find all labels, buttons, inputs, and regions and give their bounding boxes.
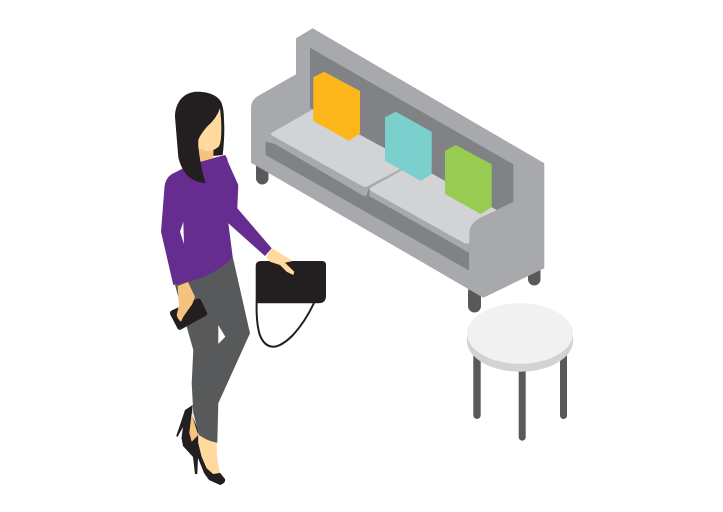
- pants: [175, 257, 250, 443]
- sweater arm gap: [180, 222, 184, 244]
- right hand: [266, 248, 294, 275]
- sofa back recess: [310, 48, 513, 210]
- bag strap: [257, 300, 314, 347]
- table: [467, 303, 573, 441]
- front foot: [198, 433, 220, 474]
- phone: [170, 299, 207, 330]
- green box: [445, 145, 492, 214]
- table top: [467, 303, 573, 364]
- table edge: [467, 335, 573, 372]
- handbag: [256, 261, 326, 347]
- back foot: [189, 413, 198, 442]
- table legs: [473, 350, 567, 441]
- teal box: [385, 112, 432, 181]
- hair: [175, 92, 224, 183]
- sofa legs: [256, 160, 540, 312]
- sofa body: [251, 28, 544, 298]
- sofa base shadow: [266, 142, 469, 270]
- bag body: [256, 261, 326, 303]
- face: [198, 108, 221, 151]
- orange box: [313, 72, 360, 141]
- woman: [161, 92, 326, 485]
- pants gap: [218, 325, 225, 344]
- left hand: [177, 282, 195, 322]
- sweater: [161, 155, 272, 285]
- sofa: [251, 28, 544, 313]
- seat cushion left: [271, 109, 412, 196]
- seat cushion right: [369, 164, 497, 253]
- shoes: [176, 405, 225, 485]
- neck: [198, 146, 214, 162]
